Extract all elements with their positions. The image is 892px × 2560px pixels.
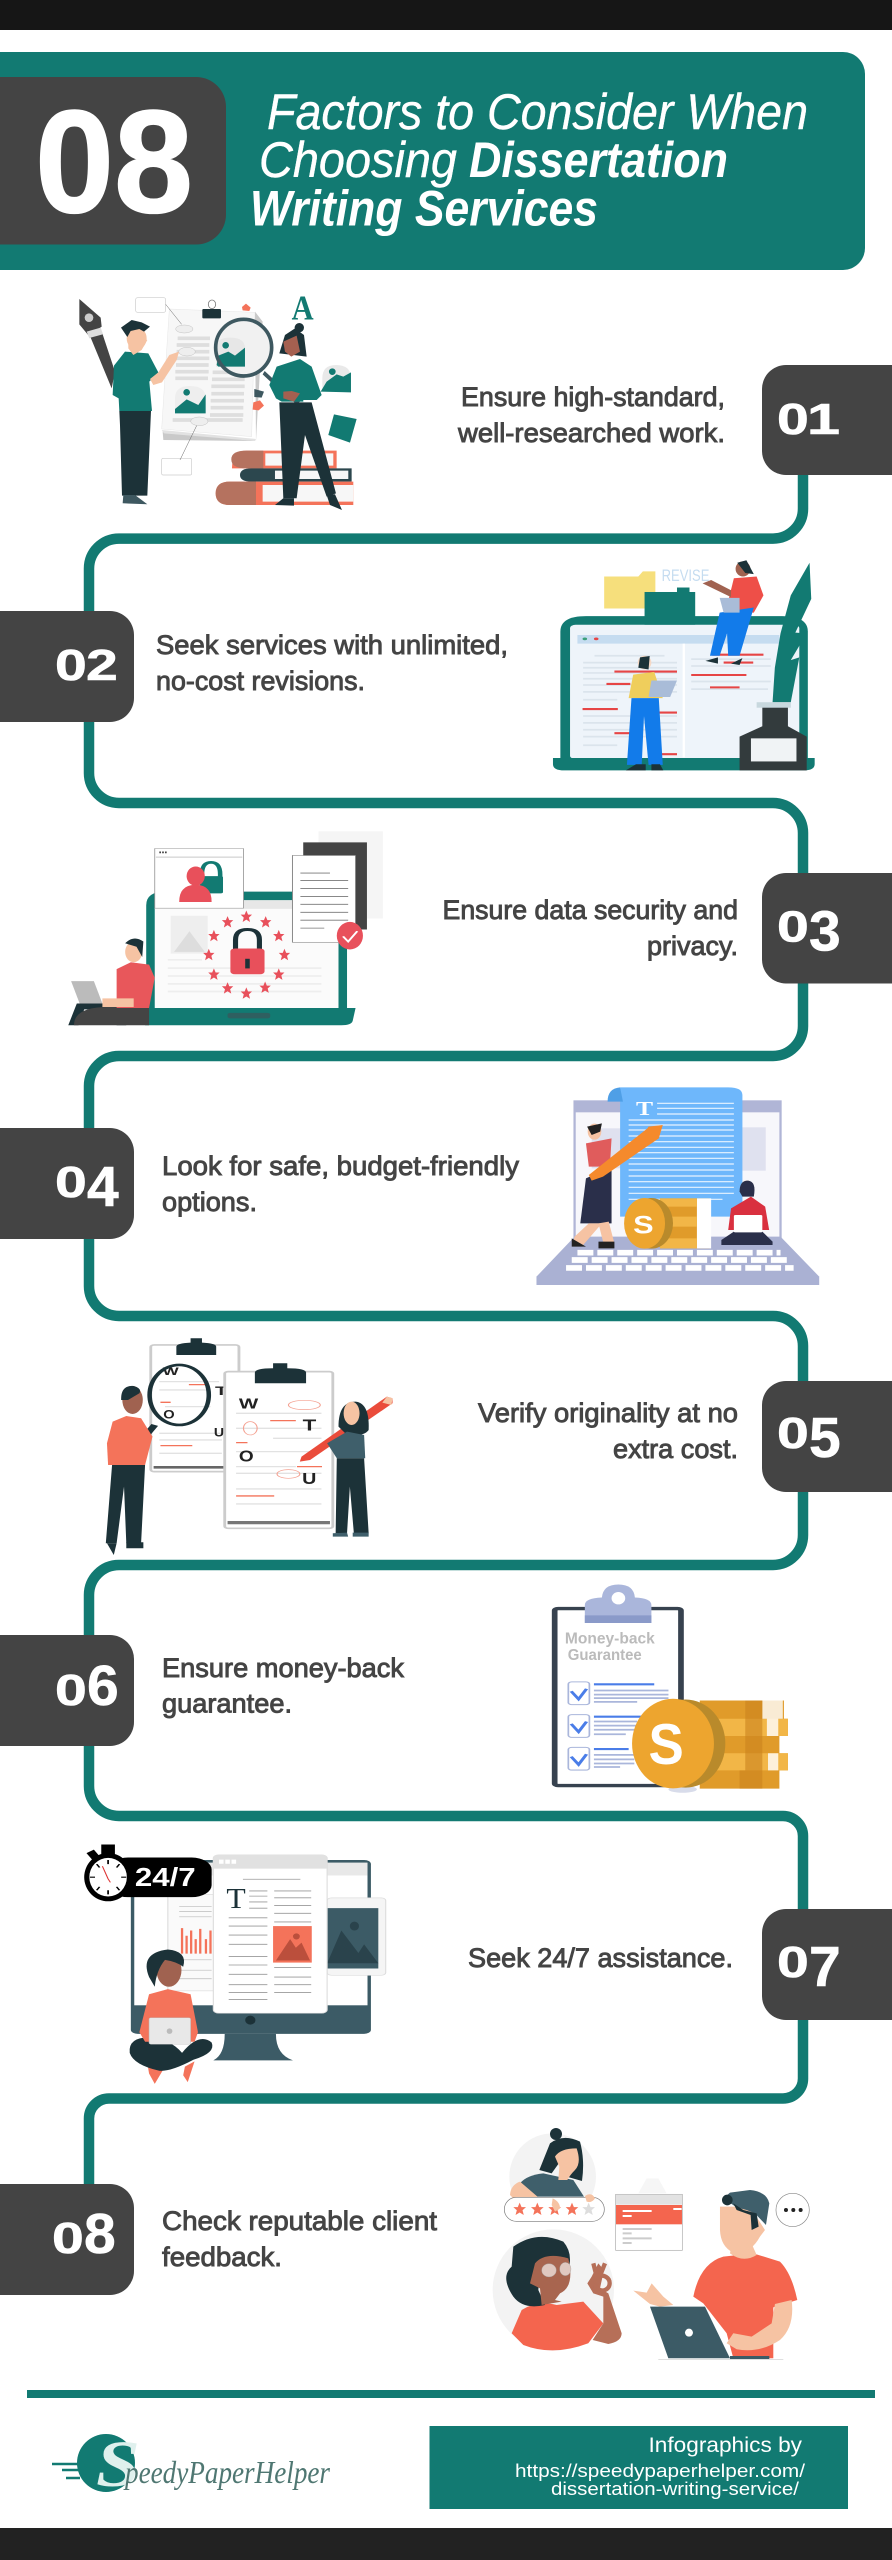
step 05 illustration: checking originality on clipboards: W (239, 1395, 259, 1412)
step 01 illustration: reviewing a document (79, 288, 357, 510)
step 06 badge: 0 (55, 1665, 87, 1714)
step 08 text: Check reputable client (162, 2206, 438, 2236)
title: Choosing (259, 132, 457, 188)
step 02 badge (0, 611, 134, 722)
step 05 text: extra cost. (613, 1434, 738, 1464)
step 07 text: Seek 24/7 assistance. (468, 1943, 733, 1973)
step 02 text: no-cost revisions. (156, 666, 365, 696)
step 05 illustration: checking originality on clipboards: O (239, 1447, 254, 1465)
step 07 illustration: 24/7 assistance: T (226, 1883, 246, 1915)
step 01 illustration: reviewing a document: A (292, 288, 314, 327)
step 05 illustration: checking originality on clipboards: U (302, 1470, 316, 1488)
title: Factors to Consider When (267, 84, 808, 140)
step 04 text: Look for safe, budget-friendly (162, 1151, 519, 1181)
step 05 illustration: checking originality on clipboards: O (163, 1408, 175, 1421)
step 05 badge (762, 1381, 892, 1492)
logo: SpeedyPaperHelper: S (96, 2428, 140, 2501)
step 06 illustration: money-back guarantee clipboard: S (649, 1711, 684, 1777)
step 04 illustration: budget-friendly writing: T (636, 1098, 653, 1120)
step 07 badge: 7 (809, 1935, 841, 1999)
step 08 badge: 8 (84, 2202, 116, 2266)
step 06 text: Ensure money-back (162, 1653, 404, 1683)
step 06 badge (0, 1635, 134, 1746)
step 04 badge: 4 (87, 1155, 119, 1219)
title: Writing Services (250, 180, 598, 236)
step 06 illustration: money-back guarantee clipboard: Guarantee (568, 1646, 642, 1664)
step 02 text: Seek services with unlimited, (156, 630, 508, 660)
step 03 badge (762, 873, 892, 984)
step 06 badge: 6 (87, 1654, 119, 1718)
serpentine connector path (89, 470, 803, 2190)
footer credit box (430, 2426, 848, 2509)
step 02 illustration: revising on a laptop (553, 560, 815, 770)
step 01 text (457, 382, 725, 448)
top black bar (0, 0, 892, 30)
step 01 text: well-researched work. (457, 418, 725, 448)
footer credit box: Infographics by (648, 2434, 803, 2457)
footer credit box: dissertation-writing-service/ (551, 2479, 799, 2499)
step 07 illustration: 24/7 assistance (84, 1844, 386, 2084)
step 05 badge: 0 (777, 1408, 809, 1457)
step 03 badge: 3 (809, 900, 841, 964)
step 02 text (156, 630, 508, 696)
step 07 illustration: 24/7 assistance: 24/7 (135, 1862, 196, 1892)
step 05 text: Verify originality at no (478, 1398, 738, 1428)
step 03 illustration: data security (68, 831, 383, 1025)
footer credit box: https://speedypaperhelper.com/ (515, 2461, 805, 2481)
step 04 badge: 0 (55, 1157, 87, 1206)
header number box (0, 77, 226, 244)
step 03 badge: 0 (777, 902, 809, 951)
step 05 illustration: checking originality on clipboards: U (214, 1426, 224, 1439)
step 02 badge: 2 (86, 640, 118, 689)
step 06 text (162, 1653, 404, 1718)
step 08 badge (0, 2184, 134, 2295)
title (250, 84, 808, 236)
logo: SpeedyPaperHelper: peedyPaperHelper (123, 2454, 330, 2490)
step 01 badge: 0 (777, 394, 809, 443)
step 06 text: guarantee. (162, 1688, 292, 1718)
step 07 badge (762, 1909, 892, 2020)
title: Dissertation (469, 132, 728, 188)
step 08 illustration: client feedback (493, 2128, 809, 2359)
step 05 illustration: checking originality on clipboards: W (163, 1366, 179, 1378)
step 03 text: privacy. (647, 931, 738, 961)
step 08 badge: 0 (52, 2213, 84, 2262)
step 03 text: Ensure data security and (442, 895, 738, 925)
step 02 badge: 0 (55, 640, 87, 689)
step 04 text: options. (162, 1187, 257, 1217)
bottom black bar (0, 2528, 892, 2560)
footer rule (27, 2390, 875, 2398)
step 05 illustration: checking originality on clipboards: T (215, 1384, 228, 1398)
step 04 illustration: budget-friendly writing: S (633, 1210, 654, 1239)
step 05 badge: 5 (809, 1406, 841, 1470)
step 01 text: Ensure high-standard, (461, 382, 725, 412)
step 07 badge: 0 (777, 1937, 809, 1986)
logo: SpeedyPaperHelper (52, 2428, 330, 2501)
step 06 illustration: money-back guarantee clipboard (555, 1584, 788, 1793)
step 02 illustration: revising on a laptop: REVISE (662, 566, 709, 585)
step 01 badge (762, 365, 892, 475)
step 04 text (162, 1151, 519, 1217)
step 06 illustration: money-back guarantee clipboard: Money-back (565, 1629, 655, 1647)
step 03 text (442, 895, 738, 961)
step 08 text (162, 2206, 438, 2272)
step 05 illustration: checking originality on clipboards (106, 1338, 393, 1555)
step 04 illustration: budget-friendly writing (536, 1087, 819, 1285)
header number box: 08 (35, 80, 193, 243)
step 05 illustration: checking originality on clipboards: T (303, 1416, 317, 1434)
step 08 text: feedback. (162, 2242, 282, 2272)
header banner (0, 52, 865, 270)
step 05 text (478, 1398, 738, 1464)
step 04 badge (0, 1128, 134, 1239)
step 01 badge: 1 (807, 395, 840, 444)
